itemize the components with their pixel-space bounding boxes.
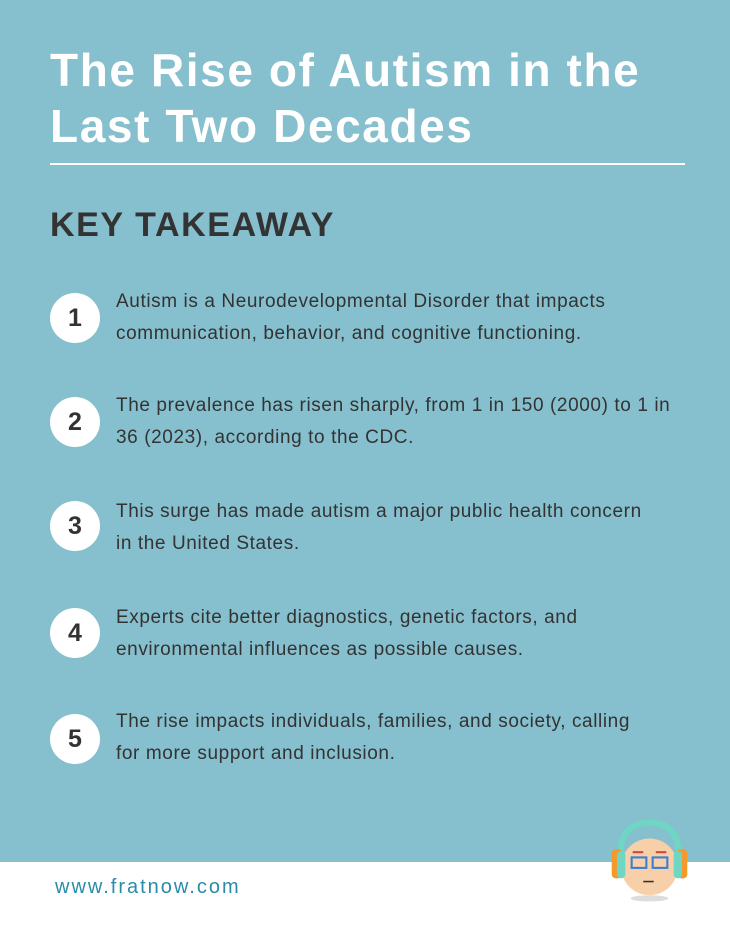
item 3: This surge has made autism a major public health concern — [116, 501, 642, 522]
title — [50, 44, 640, 152]
heading: key takeaway: KEY TAKEAWAY — [50, 206, 335, 244]
title: Last Two Decades — [50, 100, 474, 152]
item 2: The prevalence has risen sharply, from 1 in 150 (2000) to 1 in — [116, 395, 670, 416]
item 4 — [50, 607, 578, 660]
item 1: communication, behavior, and cognitive functioning. — [116, 323, 582, 344]
icon: mascot with headphones — [612, 820, 688, 902]
item 3: in the United States. — [116, 533, 300, 554]
item 2: 2 — [68, 408, 82, 436]
item 4: environmental influences as possible causes. — [116, 639, 524, 660]
item 3 — [50, 501, 642, 554]
item 2 — [50, 395, 670, 448]
item 1: Autism is a Neurodevelopmental Disorder that impacts — [116, 291, 606, 312]
item 5 — [50, 711, 630, 764]
item 5: 5 — [68, 725, 82, 753]
item 5: for more support and inclusion. — [116, 743, 395, 764]
title: The Rise of Autism in the — [50, 44, 640, 96]
item 4: 4 — [68, 619, 82, 647]
footer url: www.fratnow.com — [55, 876, 241, 898]
item 1 — [50, 291, 606, 344]
item 3: 3 — [68, 512, 82, 540]
item 5: The rise impacts individuals, families, and society, calling — [116, 711, 630, 732]
item 4: Experts cite better diagnostics, genetic factors, and — [116, 607, 578, 628]
item 2: 36 (2023), according to the CDC. — [116, 427, 414, 448]
item 1: 1 — [68, 304, 82, 332]
